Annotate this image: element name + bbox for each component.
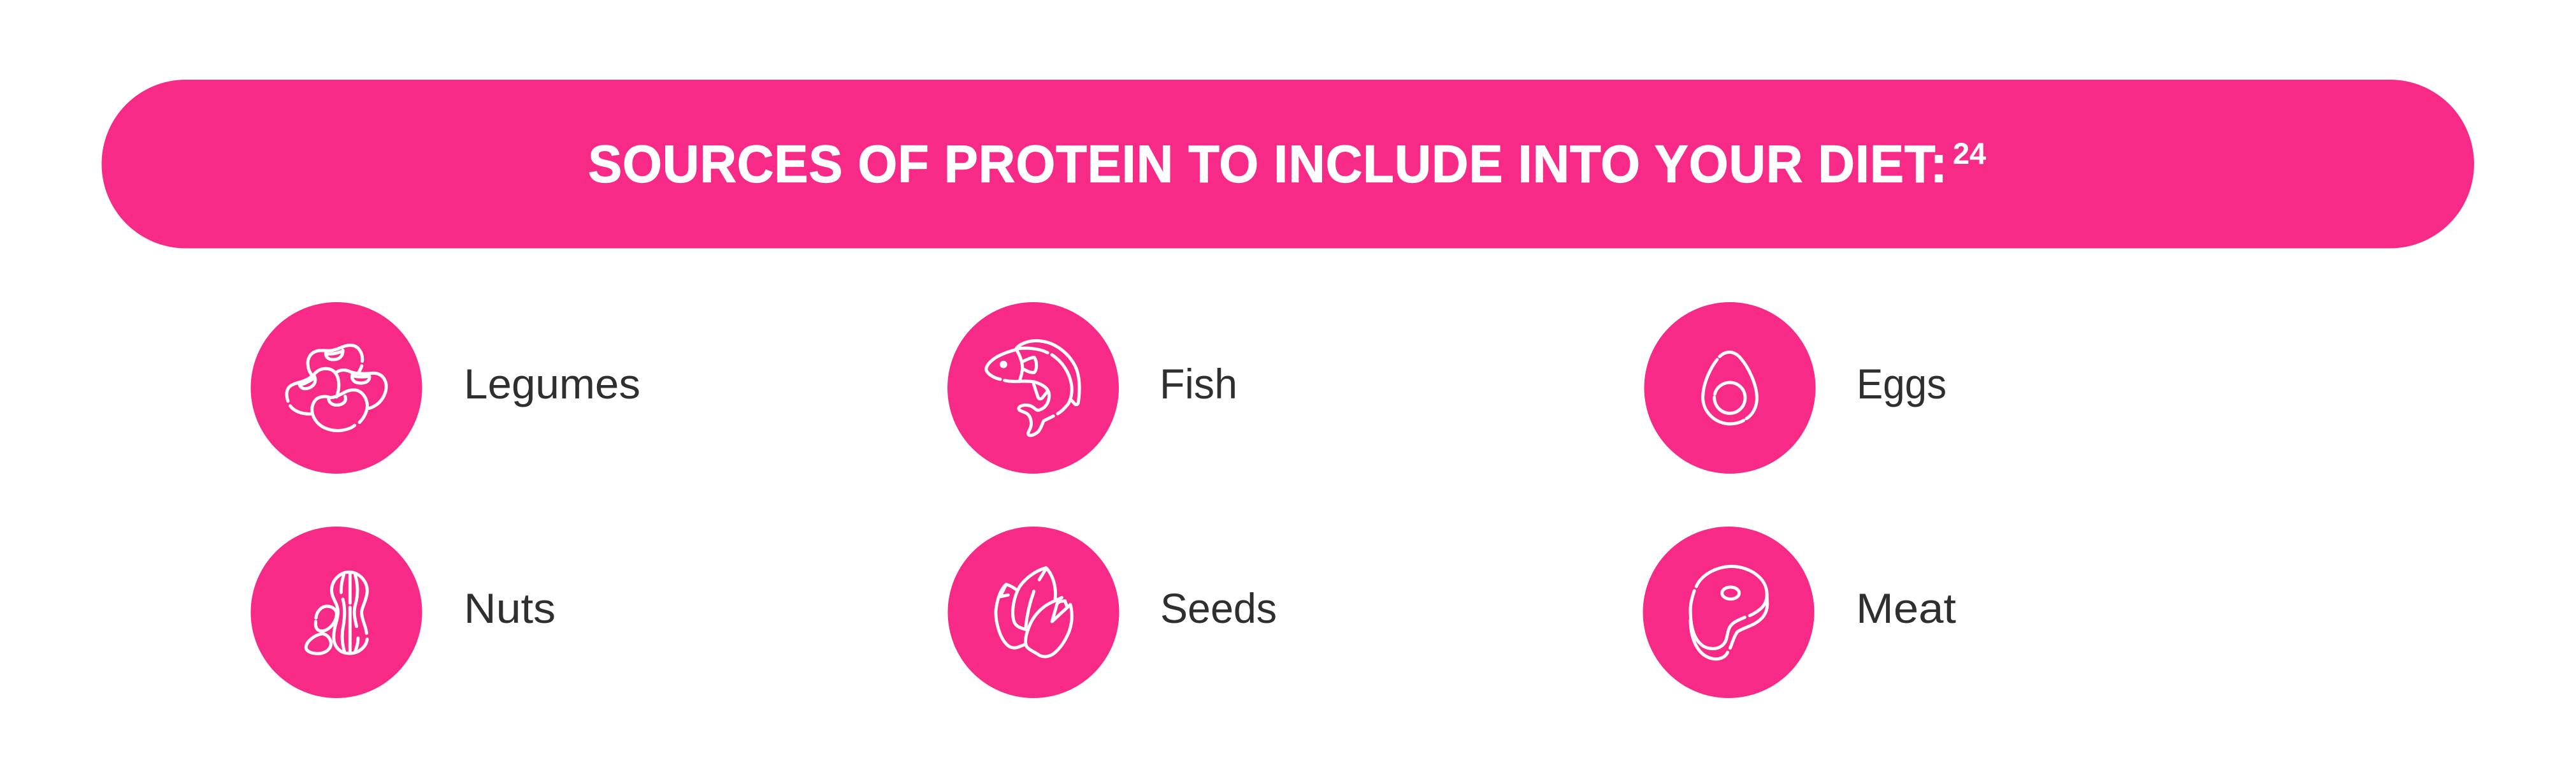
item: fish xyxy=(947,302,1237,474)
icon: beans xyxy=(287,346,386,430)
label: meat: Meat xyxy=(1856,585,1956,632)
item: seeds xyxy=(948,527,1277,698)
title banner xyxy=(102,80,2474,249)
item: meat xyxy=(1643,527,1956,698)
label: eggs: Eggs xyxy=(1857,360,1946,407)
item: legumes xyxy=(251,302,640,474)
icon circle: fish xyxy=(947,302,1119,474)
item: nuts xyxy=(251,527,556,698)
footnote reference: 24 xyxy=(1953,136,1986,170)
title: SOURCES OF PROTEIN TO INCLUDE INTO YOUR DIET: xyxy=(588,135,1947,194)
icon circle: nuts xyxy=(251,527,422,698)
label: fish: Fish xyxy=(1160,360,1237,407)
label: nuts: Nuts xyxy=(464,585,556,632)
icon: seeds xyxy=(996,568,1072,657)
icon circle: meat xyxy=(1643,527,1815,698)
icon: peanut xyxy=(306,572,367,653)
icon circle: legumes xyxy=(251,302,422,474)
item: eggs xyxy=(1644,302,1946,474)
icon: egg xyxy=(1703,352,1757,424)
icon circle: seeds xyxy=(948,527,1119,698)
icon: fish xyxy=(986,341,1079,435)
icon circle: eggs xyxy=(1644,302,1816,474)
label: seeds: Seeds xyxy=(1160,585,1277,632)
label: legumes: Legumes xyxy=(464,360,640,407)
icon: steak xyxy=(1690,566,1767,659)
